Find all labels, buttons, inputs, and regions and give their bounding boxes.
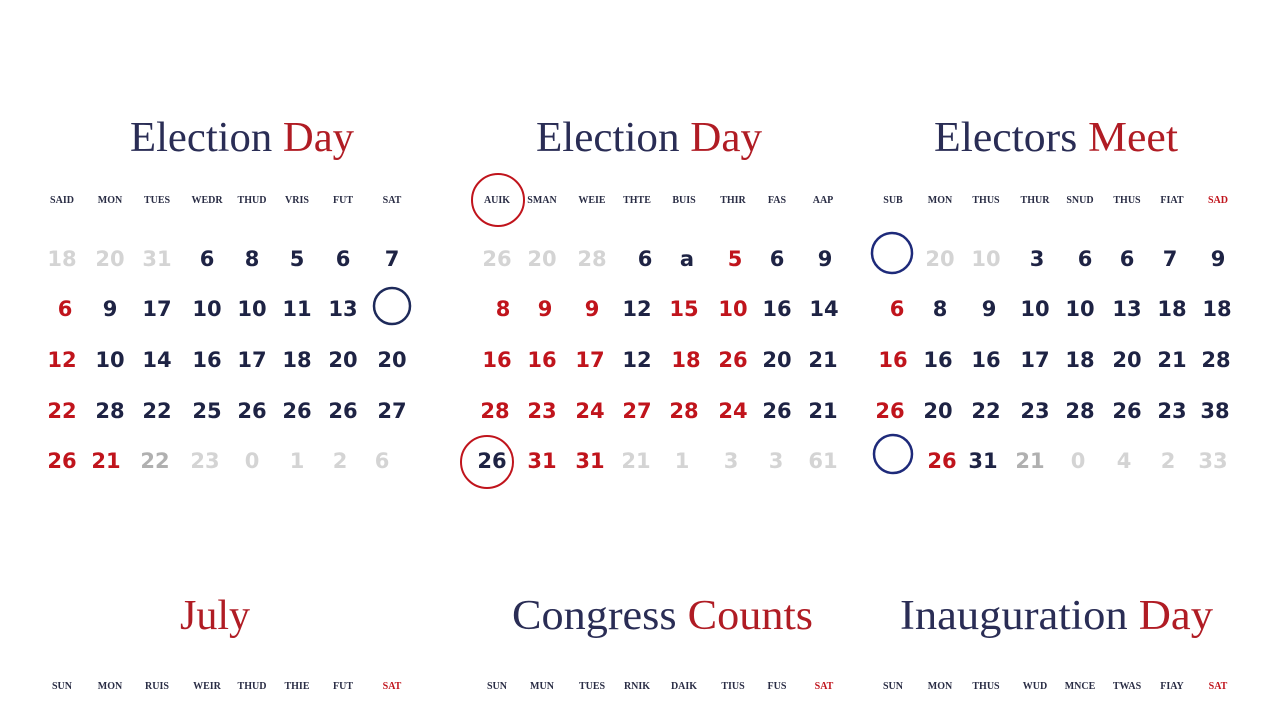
- panel: calendar 5 Congress Counts: [487, 593, 834, 692]
- weekday header 1: VRIS: [285, 195, 309, 206]
- date grid 2: 26: [718, 348, 748, 372]
- date grid 3: 9: [982, 297, 996, 321]
- date grid 3: 22: [971, 399, 1001, 423]
- date grid 3: 23: [1157, 399, 1187, 423]
- date grid 1: 21: [91, 449, 121, 473]
- date grid 2: 8: [496, 297, 510, 321]
- date grid 1: 18: [282, 348, 312, 372]
- date grid 3: 20: [923, 399, 953, 423]
- date grid 1: 8: [245, 247, 259, 271]
- date grid 3: 23: [1020, 399, 1050, 423]
- panel: calendar 1 Election Day: [47, 115, 410, 473]
- weekday header 1: [50, 195, 402, 206]
- highlight circle 3a: [872, 233, 912, 273]
- date grid 2: 9: [538, 297, 552, 321]
- date grid 3: 2: [1161, 449, 1175, 473]
- date grid 2: [477, 247, 839, 473]
- date grid 1: 20: [328, 348, 358, 372]
- date grid 2: 9: [585, 297, 599, 321]
- panel: calendar 4 July: [52, 593, 402, 692]
- date grid 3: 6: [890, 297, 904, 321]
- weekday header 5: MUN: [530, 681, 555, 692]
- date grid 3: 6: [1078, 247, 1092, 271]
- date grid 3: 13: [1112, 297, 1142, 321]
- date grid 2: 12: [622, 297, 652, 321]
- weekday header 3: THUS: [1113, 195, 1141, 206]
- weekday header 5: TUES: [579, 681, 605, 692]
- date grid 3: 18: [1065, 348, 1095, 372]
- date grid 1: 16: [192, 348, 222, 372]
- date grid 3: 18: [1157, 297, 1187, 321]
- date grid 3: 20: [925, 247, 955, 271]
- weekday header 6: [883, 681, 1228, 692]
- date grid 3: 16: [971, 348, 1001, 372]
- date grid 1: 28: [95, 399, 125, 423]
- date grid 1: 5: [290, 247, 304, 271]
- date grid 1: 10: [95, 348, 125, 372]
- weekday header 5: [487, 681, 834, 692]
- weekday header 6: WUD: [1023, 681, 1047, 692]
- date grid 1: 14: [142, 348, 172, 372]
- date grid 3: 18: [1202, 297, 1232, 321]
- weekday header 3: MON: [928, 195, 953, 206]
- date grid 1: 20: [95, 247, 125, 271]
- date grid 1: 13: [328, 297, 358, 321]
- title: July: July: [180, 593, 250, 639]
- title: Electors Meet: Electors Meet: [934, 115, 1178, 161]
- date grid 2: 6: [770, 247, 784, 271]
- weekday header 5: DAIK: [671, 681, 697, 692]
- weekday header 4: THUD: [238, 681, 266, 692]
- date grid 2: 16: [527, 348, 557, 372]
- title: Election Day 1: Election Day: [130, 115, 354, 161]
- date grid 3: 16: [878, 348, 908, 372]
- panel: calendar 3 Electors Meet: [872, 115, 1232, 473]
- date grid 1: 9: [103, 297, 117, 321]
- date grid 2: 9: [818, 247, 832, 271]
- date grid 1: 25: [192, 399, 222, 423]
- weekday header 1: MON: [98, 195, 123, 206]
- date grid 2: 28: [480, 399, 510, 423]
- date grid 2: 21: [808, 348, 838, 372]
- date grid 1: 22: [140, 449, 170, 473]
- weekday header 6: MNCE: [1065, 681, 1096, 692]
- weekday header 3: SUB: [883, 195, 903, 206]
- weekday header 1: SAT: [383, 195, 402, 206]
- weekday header 2: AAP: [813, 195, 833, 206]
- weekday header 5: FUS: [768, 681, 787, 692]
- date grid 2: 17: [575, 348, 605, 372]
- weekday header 2: THTE: [623, 195, 651, 206]
- date grid 1: 2: [333, 449, 347, 473]
- title: Inauguration Day: Inauguration Day: [900, 593, 1213, 639]
- date grid 2: 27: [622, 399, 652, 423]
- highlight circle date 2: [461, 436, 513, 488]
- weekday header 3: THUS: [972, 195, 1000, 206]
- panel: calendar 2 Election Day: [461, 115, 839, 488]
- date grid 1: 6: [336, 247, 350, 271]
- weekday header 1: TUES: [144, 195, 170, 206]
- weekday header 6: TWAS: [1113, 681, 1142, 692]
- date grid 2: 21: [621, 449, 651, 473]
- date grid 1: 0: [245, 449, 259, 473]
- weekday header 4: SUN: [52, 681, 73, 692]
- weekday header 2: [484, 195, 833, 206]
- date grid 3: 28: [1065, 399, 1095, 423]
- weekday header 3: SNUD: [1066, 195, 1094, 206]
- date grid 1: [47, 247, 407, 473]
- date grid 2: a: [680, 247, 694, 271]
- date grid 1: 17: [237, 348, 267, 372]
- date grid 3: 6: [1120, 247, 1134, 271]
- date grid 2: 23: [527, 399, 557, 423]
- date grid 2: 14: [809, 297, 839, 321]
- date grid 3: 26: [1112, 399, 1142, 423]
- weekday header 5: RNIK: [624, 681, 650, 692]
- weekday header 1: WEDR: [191, 195, 223, 206]
- date grid 3: 17: [1020, 348, 1050, 372]
- date grid 1: 23: [190, 449, 220, 473]
- date grid 2: 3: [724, 449, 738, 473]
- date grid 1: 31: [142, 247, 172, 271]
- date grid 3: 16: [923, 348, 953, 372]
- weekday header 3: FIAT: [1160, 195, 1184, 206]
- weekday header 2: WEIE: [578, 195, 606, 206]
- date grid 2: 24: [718, 399, 748, 423]
- date grid 2: 61: [808, 449, 838, 473]
- date grid 2: 20: [527, 247, 557, 271]
- date grid 2: 5: [728, 247, 742, 271]
- weekday header 2: THIR: [720, 195, 747, 206]
- date grid 1: 7: [385, 247, 399, 271]
- date grid 1: 11: [282, 297, 312, 321]
- weekday header 4: THIE: [284, 681, 310, 692]
- date grid 2: 24: [575, 399, 605, 423]
- date grid 3: 10: [1020, 297, 1050, 321]
- date grid 3: 10: [1065, 297, 1095, 321]
- date grid 3: 21: [1015, 449, 1045, 473]
- title: Election Day 2: Election Day: [536, 115, 762, 161]
- date grid 1: 6: [58, 297, 72, 321]
- weekday header 2: FAS: [768, 195, 787, 206]
- title: Congress Counts: Congress Counts: [512, 593, 813, 639]
- highlight circle header 2: [472, 174, 524, 226]
- date grid 2: 26: [477, 449, 507, 473]
- date grid 2: 12: [622, 348, 652, 372]
- date grid 2: 20: [762, 348, 792, 372]
- date grid 3: 21: [1157, 348, 1187, 372]
- date grid 2: 26: [762, 399, 792, 423]
- date grid 2: 18: [671, 348, 701, 372]
- date grid 3: 0: [1071, 449, 1085, 473]
- date grid 3: 38: [1200, 399, 1230, 423]
- weekday header 2: SMAN: [527, 195, 557, 206]
- date grid 2: 31: [575, 449, 605, 473]
- weekday header 5: SUN: [487, 681, 508, 692]
- highlight circle 1: [374, 288, 410, 324]
- weekday header 4: FUT: [333, 681, 353, 692]
- weekday header 2: AUIK: [484, 195, 510, 206]
- date grid 2: 16: [482, 348, 512, 372]
- date grid 3: 26: [875, 399, 905, 423]
- weekday header 3: SAD: [1208, 195, 1228, 206]
- date grid 3: 7: [1163, 247, 1177, 271]
- date grid 1: 20: [377, 348, 407, 372]
- date grid 1: 27: [377, 399, 407, 423]
- weekday header 6: MON: [928, 681, 953, 692]
- panel: calendar 6 Inauguration Day: [883, 593, 1228, 692]
- date grid 3: 33: [1198, 449, 1228, 473]
- date grid 3: 20: [1112, 348, 1142, 372]
- date grid 1: 18: [47, 247, 77, 271]
- date grid 1: 26: [237, 399, 267, 423]
- date grid 2: 15: [669, 297, 699, 321]
- date grid 1: 22: [47, 399, 77, 423]
- weekday header 4: [52, 681, 402, 692]
- weekday header 1: SAID: [50, 195, 74, 206]
- weekday header 1: THUD: [238, 195, 266, 206]
- date grid 1: 26: [328, 399, 358, 423]
- highlight circle 3b: [874, 435, 912, 473]
- date grid 1: 1: [290, 449, 304, 473]
- weekday header 3: [883, 195, 1228, 206]
- weekday header 4: WEIR: [193, 681, 222, 692]
- weekday header 4: SAT: [383, 681, 402, 692]
- date grid 1: 26: [47, 449, 77, 473]
- date grid 1: 6: [200, 247, 214, 271]
- date grid 1: 17: [142, 297, 172, 321]
- date grid 3: 31: [968, 449, 998, 473]
- date grid 2: 26: [482, 247, 512, 271]
- weekday header 5: TIUS: [721, 681, 745, 692]
- date grid 2: 28: [577, 247, 607, 271]
- date grid 3: 4: [1117, 449, 1131, 473]
- date grid 2: 21: [808, 399, 838, 423]
- date grid 1: 22: [142, 399, 172, 423]
- weekday header 6: SAT: [1209, 681, 1228, 692]
- weekday header 6: THUS: [972, 681, 1000, 692]
- weekday header 2: BUIS: [672, 195, 696, 206]
- date grid 3: 10: [971, 247, 1001, 271]
- date grid 2: 16: [762, 297, 792, 321]
- date grid 1: 12: [47, 348, 77, 372]
- date grid 3: [875, 247, 1232, 473]
- date grid 2: 31: [527, 449, 557, 473]
- date grid 1: 10: [237, 297, 267, 321]
- weekday header 6: FIAY: [1160, 681, 1185, 692]
- weekday header 4: RUIS: [145, 681, 169, 692]
- date grid 1: 6: [375, 449, 389, 473]
- date grid 3: 28: [1201, 348, 1231, 372]
- weekday header 1: FUT: [333, 195, 353, 206]
- date grid 1: 26: [282, 399, 312, 423]
- date grid 3: 26: [927, 449, 957, 473]
- date grid 2: 3: [769, 449, 783, 473]
- weekday header 5: SAT: [815, 681, 834, 692]
- date grid 3: 3: [1030, 247, 1044, 271]
- date grid 2: 10: [718, 297, 748, 321]
- weekday header 6: SUN: [883, 681, 904, 692]
- date grid 3: 9: [1211, 247, 1225, 271]
- date grid 2: 28: [669, 399, 699, 423]
- date grid 1: 10: [192, 297, 222, 321]
- date grid 2: 6: [638, 247, 652, 271]
- date grid 3: 8: [933, 297, 947, 321]
- weekday header 3: THUR: [1021, 195, 1050, 206]
- date grid 2: 1: [675, 449, 689, 473]
- weekday header 4: MON: [98, 681, 123, 692]
